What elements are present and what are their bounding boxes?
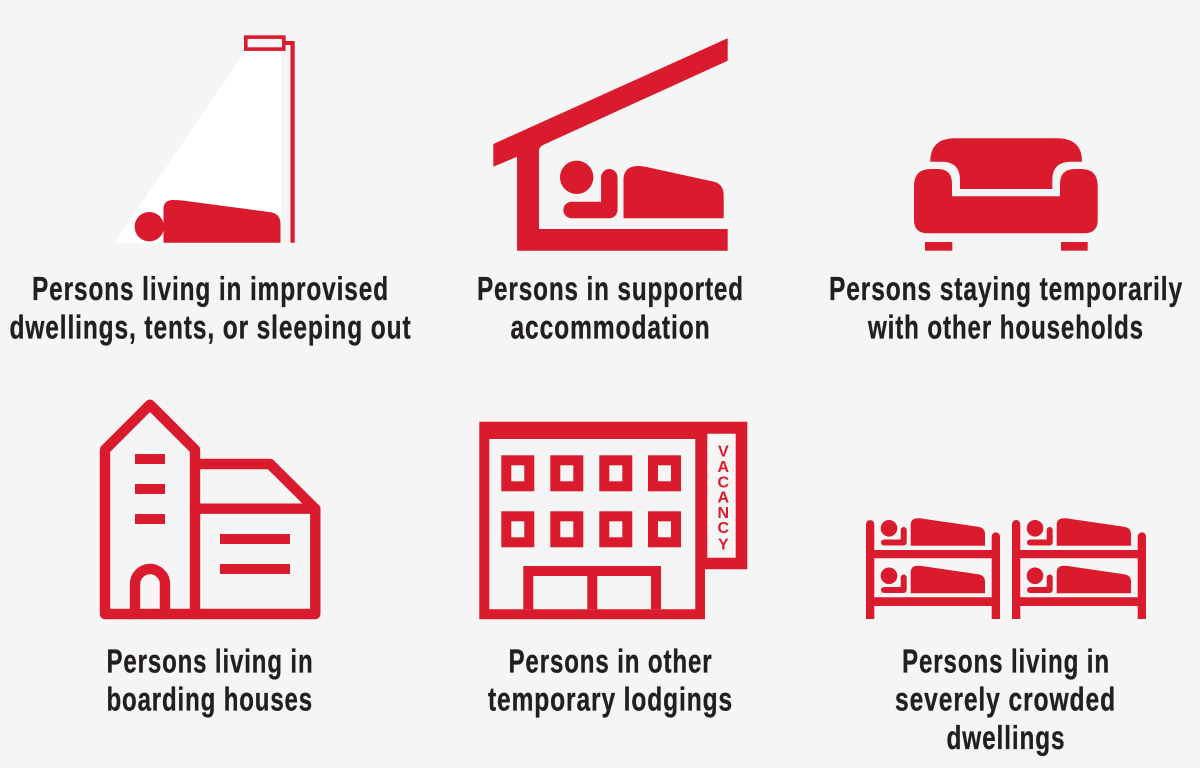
panel: improvised dwellings: [10, 37, 412, 345]
label: other temporary lodgings: Persons in other: [508, 642, 712, 679]
icon: person in bed under shelter: [493, 38, 728, 251]
panel: severely crowded dwellings: [866, 518, 1146, 756]
panel: supported accommodation: [477, 38, 744, 345]
label: severely crowded dwellings: severely crowded: [895, 681, 1116, 718]
icon: sofa: [914, 138, 1098, 251]
label: other temporary lodgings: [488, 642, 733, 718]
label: supported accommodation: [477, 270, 744, 345]
label: improvised dwellings: [10, 270, 412, 345]
label: boarding houses: boarding houses: [106, 681, 313, 718]
panel: boarding houses: [105, 405, 315, 718]
label: improvised dwellings: dwellings, tents, or sleeping out: [10, 308, 412, 345]
icon: boarding house building: [105, 405, 315, 614]
label: improvised dwellings: Persons living in improvised: [32, 270, 389, 307]
label: boarding houses: Persons living in: [106, 642, 314, 679]
label: boarding houses: [106, 642, 314, 718]
label: severely crowded dwellings: Persons living in: [902, 642, 1110, 679]
label: supported accommodation: accommodation: [510, 308, 710, 345]
panel: other temporary lodgings: [479, 422, 747, 718]
icon: two bunk beds with sleepers: [866, 518, 1146, 619]
label: supported accommodation: Persons in supported: [477, 270, 744, 307]
icon: person sleeping under street lamp: [114, 37, 295, 243]
label: severely crowded dwellings: dwellings: [946, 719, 1066, 756]
label: severely crowded dwellings: [895, 642, 1116, 756]
icon: hotel with vacancy sign: [479, 422, 747, 619]
label: other temporary lodgings: temporary lodgings: [488, 681, 733, 718]
panel: staying with other households: [829, 138, 1183, 345]
vacancy sign text: VACANCY: [718, 444, 730, 553]
label: staying with other households: [829, 270, 1183, 345]
